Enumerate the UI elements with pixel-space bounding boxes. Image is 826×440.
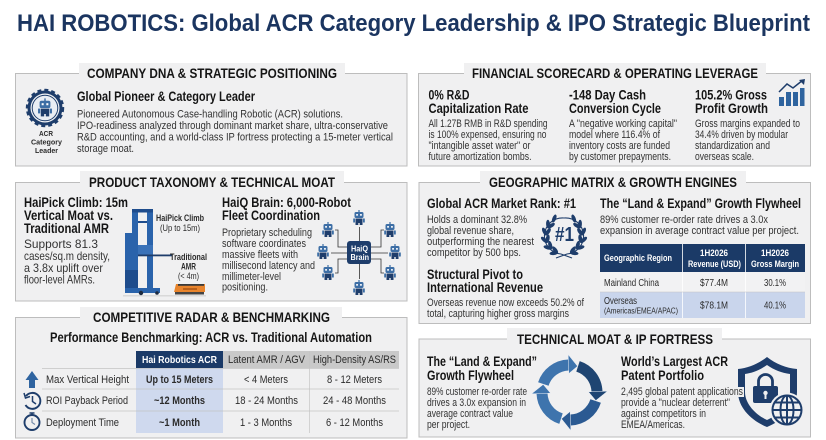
body text: re-order rate	[600, 214, 799, 237]
table row: deployment time: 1 - 3 Months	[240, 417, 292, 429]
table row: Overseas: (Americas/EMEA/APAC)	[604, 306, 678, 316]
body text: density: Supports 81.3	[24, 238, 98, 251]
icon: number one laurel	[540, 214, 588, 258]
table row: Mainland China: $77.4M	[700, 278, 728, 289]
icon: ACR category leader badge	[27, 90, 63, 126]
table row: ROI payback: ROI Payback Period	[46, 395, 128, 407]
badge label	[31, 129, 63, 155]
panel: company DNA	[16, 63, 407, 166]
panel: financial scorecard	[418, 63, 810, 166]
body text: company description: IPO-readiness analyzed through dominant market share, ultra-conservative	[77, 120, 388, 132]
table header row: High-Density AS/RS	[313, 354, 396, 366]
heading: product taxonomy: PRODUCT TAXONOMY & TECHNICAL MOAT	[89, 174, 335, 190]
panel: competitive radar	[16, 307, 407, 438]
subheading: flywheel: Growth Flywheel	[427, 368, 514, 383]
subheading: performance benchmarking: Performance Benchmarking: ACR vs. Traditional Automation	[50, 330, 372, 345]
panel: technical moat	[419, 328, 810, 437]
table header row	[142, 354, 396, 366]
diagram: HaiQ Brain fleet	[317, 210, 401, 295]
table row: max vertical height: Up to 15 Meters	[146, 374, 213, 386]
metric: cash conversion cycle: model where 116.4% of	[569, 129, 661, 141]
table: geographic revenue	[600, 244, 805, 318]
subheading: patent portfolio: World’s Largest ACR	[621, 354, 728, 369]
metric: R&D capitalization	[428, 88, 548, 163]
heading: company DNA: COMPANY DNA & STRATEGIC POSITIONING	[87, 65, 337, 81]
body text: density	[24, 238, 110, 286]
icon: shield with lock and globe	[738, 357, 804, 428]
heading: technical moat: TECHNICAL MOAT & IP FORTRESS	[517, 331, 713, 347]
body text: fleet software: software coordinates	[222, 238, 307, 250]
body text: overseas revenue	[427, 297, 585, 320]
table row: Overseas: Overseas	[604, 296, 637, 307]
table row: max vertical height: 8 - 12 Meters	[327, 374, 382, 386]
illustration: HaiPick Climb robot	[123, 209, 206, 296]
metric: cash conversion cycle: A "negative working capital"	[569, 118, 677, 130]
icon: stopwatch	[24, 413, 40, 430]
heading: financial scorecard: FINANCIAL SCORECARD & OPERATING LEVERAGE	[472, 65, 758, 81]
metric: cash conversion cycle: by customer prepayments.	[569, 151, 671, 163]
subheading: flywheel: The “Land & Expand”	[427, 354, 537, 369]
table row: Overseas	[604, 296, 786, 316]
metric: cash conversion cycle: -148 Day Cash	[569, 88, 646, 102]
label: Traditional AMR: (< 4m)	[178, 271, 199, 281]
metric: gross profit growth: Profit Growth	[695, 101, 768, 116]
label: Traditional AMR	[170, 252, 207, 281]
metric: gross profit growth: standardization and	[695, 140, 770, 152]
table header: Gross Margin	[751, 259, 799, 270]
metric: R&D capitalization: "intangible asset water" or	[428, 140, 531, 152]
panel: geographic matrix	[419, 171, 810, 324]
subheading: global pioneer: Global Pioneer & Category Leader	[77, 89, 256, 104]
body text: flywheel: average contract value	[427, 408, 513, 420]
body text: company description: storage moat.	[77, 143, 134, 155]
subheading: patent portfolio	[621, 354, 728, 383]
body text: fleet software: massive fleets with	[222, 249, 298, 261]
badge label: ACR	[39, 129, 54, 138]
icon: payback history clock	[24, 393, 40, 409]
body text: patents: provide a "nuclear deterrent"	[621, 397, 730, 409]
table header: 1H2026	[761, 248, 789, 259]
table row: deployment time: Deployment Time	[46, 417, 119, 429]
label: Traditional AMR: AMR	[181, 262, 196, 272]
icon: growth bar chart	[779, 79, 805, 106]
table header row: Latent AMR / AGV	[228, 354, 306, 366]
body text: fleet software: millimeter-level	[222, 271, 281, 283]
table row: ROI payback	[46, 395, 386, 407]
subheading: HaiQ Brain	[222, 195, 351, 223]
table header	[604, 248, 799, 270]
heading: geographic matrix: GEOGRAPHIC MATRIX & GROWTH ENGINES	[489, 174, 737, 190]
icon: number one laurel: #1	[555, 224, 574, 246]
label: HaiPick Climb	[156, 213, 204, 233]
metric: cash conversion cycle: Conversion Cycle	[569, 101, 661, 116]
body text: density: a 3.8x uplift over	[24, 262, 103, 275]
body text: company description: Pioneered Autonomous Case-handling Robotic (ACR) solutions.	[77, 108, 343, 120]
table header: Geographic Region	[604, 253, 672, 264]
body text: patents: 2,495 global patent applications	[621, 386, 743, 398]
subheading: structural pivot: International Revenue	[427, 280, 543, 295]
table row: deployment time	[46, 417, 383, 429]
table row: Mainland China	[604, 278, 786, 289]
body text: flywheel: 89% customer re-order rate	[427, 386, 527, 398]
subheading: HaiPick Climb: HaiPick Climb: 15m	[24, 195, 128, 210]
icon: up arrow	[26, 371, 38, 388]
table row: max vertical height: < 4 Meters	[244, 374, 288, 386]
table row: ROI payback: 18 - 24 Months	[235, 395, 298, 407]
table row: deployment time: ~1 Month	[159, 417, 200, 429]
subheading: HaiQ Brain: HaiQ Brain: 6,000-Robot	[222, 195, 351, 210]
body text: re-order rate: 89% customer re-order rate drives a 3.0x	[600, 214, 769, 226]
metric: R&D capitalization: future amortization bombs.	[428, 151, 532, 163]
body text: market rank	[427, 214, 534, 259]
body text: company description	[77, 108, 393, 155]
body text: patents	[621, 386, 744, 431]
subheading: structural pivot: Structural Pivot to	[427, 267, 523, 282]
body text: fleet software	[222, 227, 315, 294]
metric: cash conversion cycle: inventory costs are funded	[569, 140, 670, 152]
metric: cash conversion cycle	[569, 88, 677, 163]
label: HaiPick Climb: (Up to 15m)	[160, 223, 200, 233]
subheading: HaiPick Climb: Vertical Moat vs.	[24, 208, 113, 223]
table row: Overseas: $78.1M	[700, 300, 728, 312]
table header: 1H2026	[700, 248, 728, 259]
body text: density: floor-level AMRs.	[24, 274, 95, 286]
subheading: HaiPick Climb	[24, 195, 128, 236]
body text: flywheel: per project.	[427, 419, 470, 431]
table row: Mainland China: Mainland China	[604, 278, 659, 289]
icon: circular flywheel arrows	[532, 355, 607, 430]
body text: market rank: Holds a dominant 32.8%	[427, 214, 527, 226]
metric: gross profit growth	[695, 88, 800, 163]
table row: max vertical height	[46, 374, 382, 386]
subheading: flywheel	[427, 354, 537, 383]
body text: flywheel: drives a 3.0x expansion in	[427, 397, 526, 409]
subheading: HaiPick Climb: Traditional AMR	[24, 221, 109, 236]
body text: patents: against competitors in	[621, 408, 706, 420]
table row: Mainland China: 30.1%	[764, 278, 786, 289]
illustration: traditional AMR	[174, 284, 205, 294]
heading: competitive radar: COMPETITIVE RADAR & BENCHMARKING	[93, 309, 330, 325]
subheading: patent portfolio: Patent Portfolio	[621, 368, 704, 383]
subheading: HaiQ Brain: Fleet Coordination	[222, 208, 320, 223]
metric: R&D capitalization: 0% R&D	[428, 88, 470, 102]
table row: ROI payback: ~12 Months	[154, 395, 205, 407]
metric: gross profit growth: Gross margins expanded to	[695, 118, 800, 130]
badge label: Category	[31, 138, 63, 146]
table: benchmarking	[42, 351, 399, 433]
body text: market rank: global revenue share,	[427, 225, 514, 237]
subheading: structural pivot	[427, 267, 543, 295]
diagram: HaiQ Brain fleet: Brain	[350, 252, 369, 262]
body text: flywheel	[427, 386, 527, 431]
table row: deployment time: 6 - 12 Months	[326, 417, 383, 429]
body text: patents: EMEA/Americas.	[621, 419, 685, 431]
body text: market rank: competitor by 500 bps.	[427, 247, 521, 259]
subheading: market rank: Global ACR Market Rank: #1	[427, 196, 576, 211]
table row: ROI payback: 24 - 48 Months	[323, 395, 386, 407]
body text: overseas revenue: total, capturing higher gross margins	[427, 308, 569, 320]
table row: Overseas: 40.1%	[764, 300, 786, 312]
body text: density: cases/sq.m density,	[24, 250, 110, 263]
table row: max vertical height: Max Vertical Height	[46, 374, 129, 386]
diagram: HaiQ Brain fleet: HaiQ	[351, 244, 368, 254]
label: HaiPick Climb: HaiPick Climb	[156, 213, 204, 223]
body text: overseas revenue: Overseas revenue now exceeds 50.2% of	[427, 297, 585, 309]
body text: fleet software: Proprietary scheduling	[222, 227, 312, 239]
body text: re-order rate: expansion in average contract value per project.	[600, 225, 799, 237]
body text: market rank: outperforming the nearest	[427, 236, 534, 248]
label: Traditional AMR: Traditional	[170, 252, 207, 262]
metric: gross profit growth: 105.2% Gross	[695, 88, 767, 102]
body text: company description: R&D accounting, and a world-class IP fortress protecting a 15-meter vertical	[77, 132, 393, 144]
table header: Revenue (USD)	[688, 259, 741, 270]
body text: fleet software: millisecond latency and	[222, 260, 315, 272]
metric: R&D capitalization: All 1.27B RMB in R&D spending	[428, 118, 548, 130]
metric: gross profit growth: 34.4% driven by modular	[695, 129, 788, 141]
body text: fleet software: positioning.	[222, 282, 268, 294]
table header row: Hai Robotics ACR	[142, 355, 218, 366]
metric: R&D capitalization: Capitalization Rate	[428, 101, 529, 116]
panel: product taxonomy	[16, 171, 407, 301]
metric: R&D capitalization: is 100% expensed, ensuring no	[428, 129, 546, 141]
metric: gross profit growth: overseas scale.	[695, 151, 754, 163]
badge label: Leader	[35, 146, 58, 155]
